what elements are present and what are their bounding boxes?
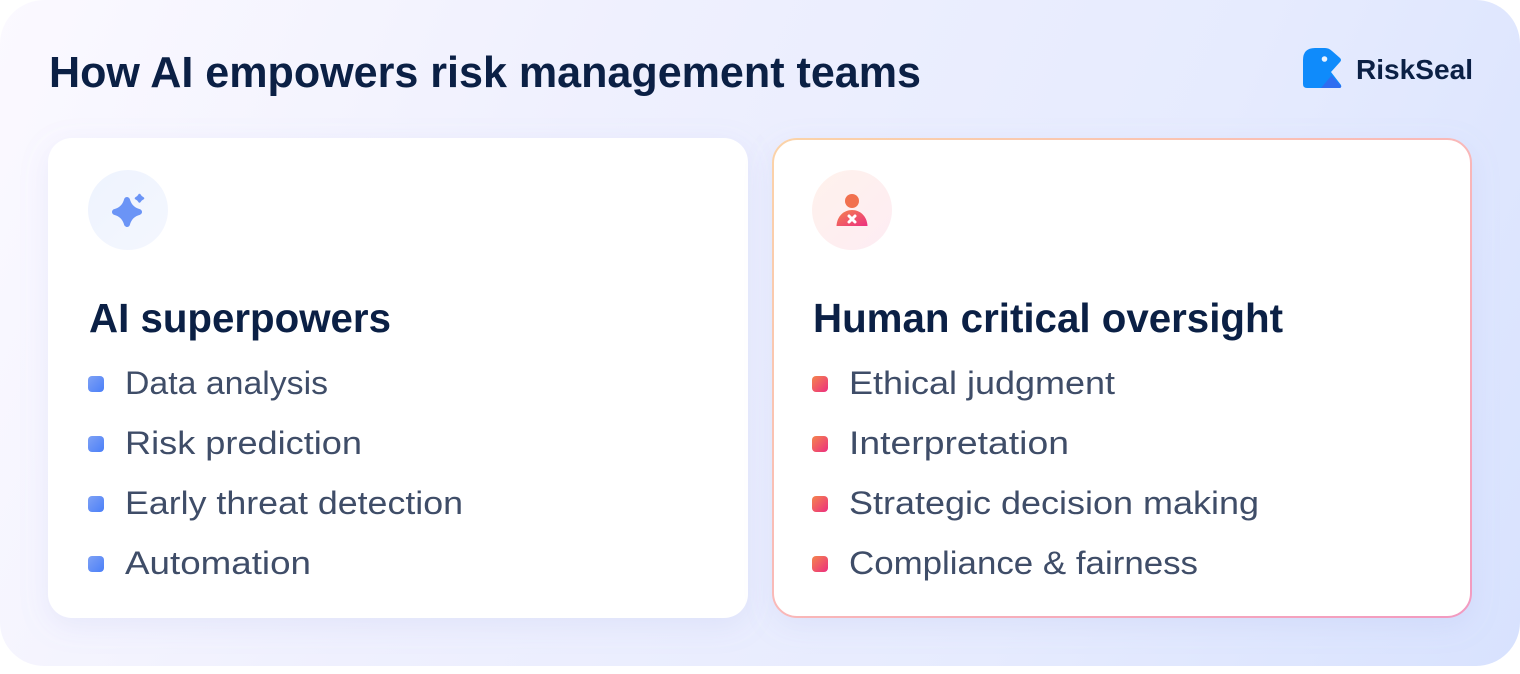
- heading: AI superpowers: AI superpowers: [89, 295, 391, 341]
- logo wordmark: RiskSeal: [1356, 54, 1473, 85]
- list item: Strategic decision making: Strategic decision making: [849, 485, 1259, 521]
- logo: RiskSeal: [1303, 48, 1473, 88]
- icon: person with x: [812, 170, 892, 250]
- list item: Interpretation: Interpretation: [849, 425, 1069, 461]
- heading: Human critical oversight: Human critical oversight: [813, 295, 1283, 341]
- icon: seal logo mark: [1303, 48, 1341, 88]
- icon: sparkles: [88, 170, 168, 250]
- list item: Early threat detection: Early threat detection: [125, 485, 463, 521]
- list item: Data analysis: Data analysis: [125, 365, 328, 401]
- card background: [773, 139, 1471, 617]
- list item: Ethical judgment: Ethical judgment: [849, 365, 1115, 401]
- panel: AI superpowers: [48, 138, 748, 618]
- list item: Compliance & fairness: Compliance & fairness: [849, 545, 1198, 581]
- list item: Risk prediction: Risk prediction: [125, 425, 362, 461]
- list item: Automation: Automation: [125, 545, 311, 581]
- panel: Human critical oversight: [773, 139, 1471, 617]
- title: How AI empowers risk management teams: [49, 48, 921, 97]
- card background: [48, 138, 748, 618]
